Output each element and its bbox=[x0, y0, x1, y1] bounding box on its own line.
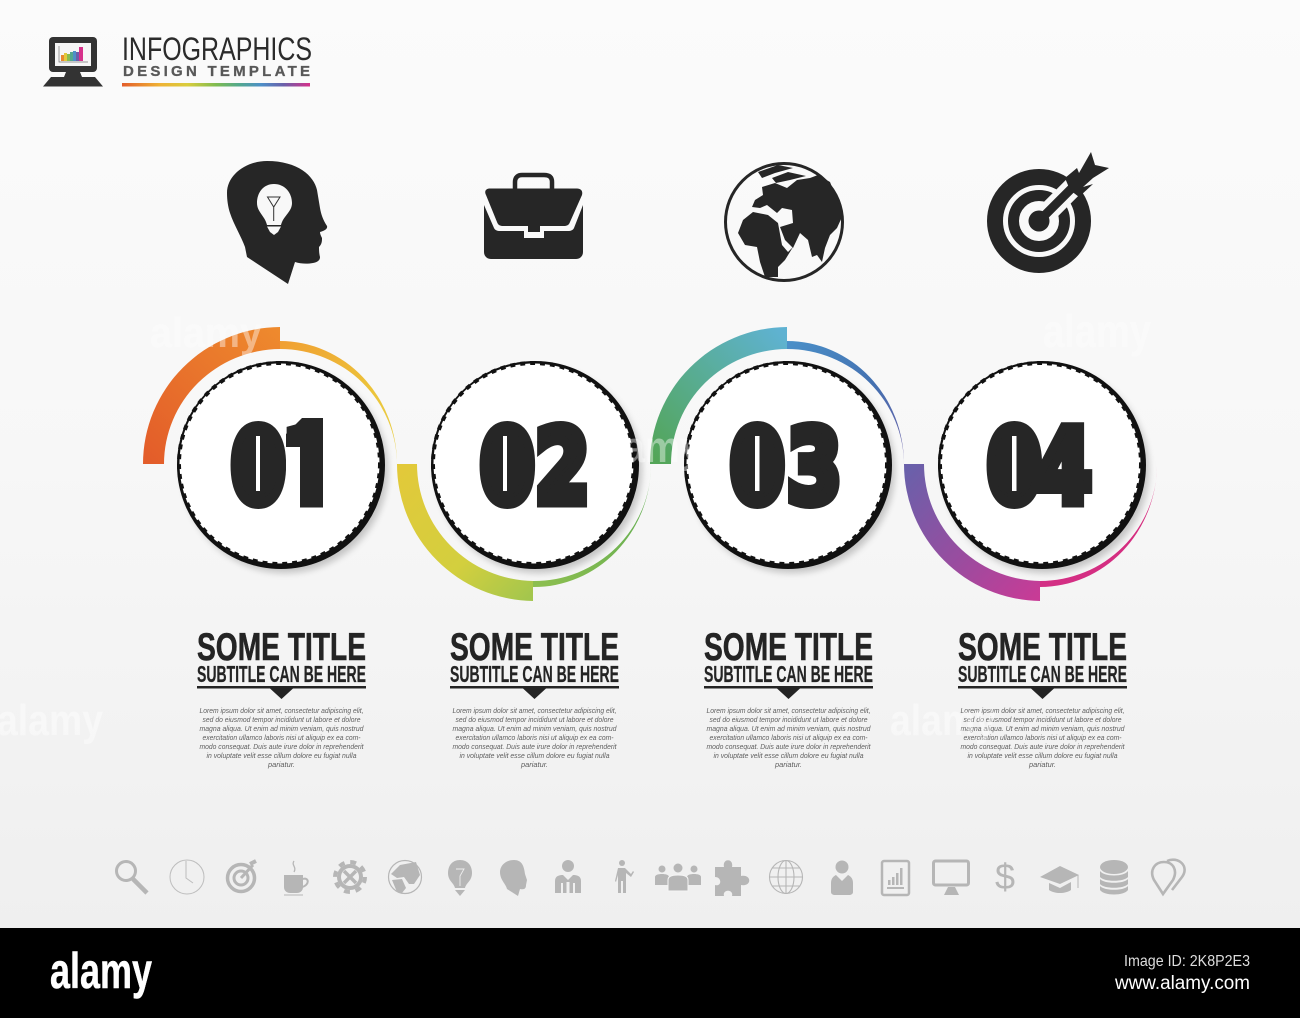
text block: step 4: SOME TITLE bbox=[958, 626, 1127, 669]
logo heading: INFOGRAPHICS bbox=[122, 31, 312, 67]
icon: team bbox=[655, 864, 701, 891]
icon: target with arrow bbox=[995, 152, 1109, 265]
watermarks: alamy bbox=[590, 423, 702, 472]
text block: step 1: Lorem ipsum dolor sit amet, consectetur adipiscing elit, bbox=[200, 706, 364, 715]
number 01 bbox=[231, 409, 337, 527]
text block: step 4: SUBTITLE CAN BE HERE bbox=[958, 661, 1127, 687]
icon row bbox=[116, 856, 1185, 897]
icon: clock bbox=[170, 860, 204, 894]
icon: coins bbox=[1100, 860, 1128, 894]
rainbow underline bbox=[122, 83, 310, 86]
text block: step 1 bbox=[197, 626, 366, 769]
icon: coffee cup bbox=[284, 861, 308, 895]
text block: step 4: sed do eiusmod tempor incididunt ut labore et dolore bbox=[964, 715, 1122, 724]
watermarks: alamy bbox=[0, 696, 103, 745]
text block: step 1: magna aliqua. Ut enim ad minim veniam, quis nostrud bbox=[200, 724, 364, 733]
text block: step 3: sed do eiusmod tempor incididunt ut labore et dolore bbox=[710, 715, 868, 724]
number 03: 0 bbox=[730, 409, 785, 527]
number badge 02 bbox=[431, 361, 642, 573]
icon: target bbox=[228, 861, 256, 892]
icon: dollar sign: $ bbox=[995, 856, 1015, 897]
icon: head with light bulb bbox=[227, 161, 327, 284]
text block: step 4: Lorem ipsum dolor sit amet, consectetur adipiscing elit, bbox=[960, 706, 1124, 715]
icon: tablet with chart bbox=[882, 861, 909, 895]
watermarks: alamy bbox=[890, 696, 996, 745]
text block: step 3: SUBTITLE CAN BE HERE bbox=[704, 661, 873, 687]
number badge 03 bbox=[684, 361, 895, 573]
panel: step 02 arc bbox=[397, 464, 651, 601]
number 02 bbox=[480, 409, 590, 527]
text block: step 2: modo consequat. Duis aute irure dolor in reprehenderit bbox=[452, 742, 617, 751]
text block: step 1: pariatur. bbox=[267, 760, 295, 769]
text block: step 1: modo consequat. Duis aute irure dolor in reprehenderit bbox=[200, 742, 364, 751]
text block: step 3: magna aliqua. Ut enim ad minim veniam, quis nostrud bbox=[706, 724, 871, 733]
icon: desktop monitor bbox=[934, 861, 968, 895]
text block: step 2: magna aliqua. Ut enim ad minim veniam, quis nostrud bbox=[452, 724, 617, 733]
number badge 04 bbox=[938, 361, 1149, 573]
footer logo: alamy bbox=[50, 943, 152, 999]
number 02: 0 bbox=[480, 409, 535, 527]
number 04 bbox=[987, 409, 1092, 527]
text block: step 4: exercitation ullamco laboris nisi ut aliquip ex ea com- bbox=[964, 733, 1122, 742]
text block: step 4: pariatur. bbox=[1028, 760, 1056, 769]
text block: step 2: sed do eiusmod tempor incididunt ut labore et dolore bbox=[456, 715, 614, 724]
icon: earth globe bbox=[726, 164, 842, 280]
text block: step 3 bbox=[704, 626, 873, 769]
icon: magnifier bbox=[116, 862, 147, 893]
text block: step 2: in voluptate velit esse cillum dolore eu fugiat nulla bbox=[460, 751, 610, 760]
watermarks: alamy bbox=[1043, 305, 1151, 357]
text block: step 2 bbox=[450, 626, 619, 769]
icon: wire globe bbox=[770, 860, 802, 894]
icon: computer monitor bbox=[43, 37, 103, 86]
icon: presenter bbox=[615, 860, 634, 893]
number 04: 4 bbox=[1037, 409, 1092, 527]
watermarks bbox=[0, 305, 1151, 745]
text block: step 3: in voluptate velit esse cillum dolore eu fugiat nulla bbox=[714, 751, 864, 760]
icon: user bbox=[831, 860, 853, 895]
number 02: 2 bbox=[535, 409, 590, 527]
watermarks: alamy bbox=[150, 309, 263, 356]
icon: small head bbox=[500, 860, 527, 896]
icon: small globe bbox=[388, 860, 422, 894]
image id: Image ID: 2K8P2E3 bbox=[1124, 953, 1250, 970]
icon: small bulb bbox=[448, 860, 472, 896]
text block: step 2: pariatur. bbox=[520, 760, 548, 769]
text block: step 2: Lorem ipsum dolor sit amet, consectetur adipiscing elit, bbox=[452, 706, 616, 715]
text block: step 2: exercitation ullamco laboris nisi ut aliquip ex ea com- bbox=[456, 733, 614, 742]
text block: step 1: exercitation ullamco laboris nisi ut aliquip ex ea com- bbox=[202, 733, 361, 742]
website: www.alamy.com bbox=[1114, 973, 1250, 994]
icon: map pins bbox=[1152, 860, 1185, 894]
text block: step 4 bbox=[958, 626, 1127, 769]
text block: step 2: SOME TITLE bbox=[450, 626, 619, 669]
number 03 bbox=[730, 409, 842, 527]
text block: step 3: modo consequat. Duis aute irure dolor in reprehenderit bbox=[706, 742, 871, 751]
text block: step 3: pariatur. bbox=[774, 760, 802, 769]
text block: step 2: SUBTITLE CAN BE HERE bbox=[450, 661, 619, 687]
panel: step 01 arc bbox=[143, 327, 397, 465]
icon: gear bbox=[335, 862, 365, 892]
panel: step 03 arc bbox=[650, 327, 904, 465]
number badge 01 bbox=[177, 361, 388, 573]
number 03: 3 bbox=[787, 409, 842, 527]
number 01: 0 bbox=[231, 409, 286, 527]
text block: step 3: Lorem ipsum dolor sit amet, consectetur adipiscing elit, bbox=[706, 706, 870, 715]
panel: step 04 arc bbox=[904, 464, 1157, 601]
logo subheading: DESIGN TEMPLATE bbox=[123, 63, 310, 80]
text block: step 1: SUBTITLE CAN BE HERE bbox=[197, 661, 366, 687]
text block: step 3: exercitation ullamco laboris nisi ut aliquip ex ea com- bbox=[710, 733, 868, 742]
text block: step 4: in voluptate velit esse cillum dolore eu fugiat nulla bbox=[968, 751, 1118, 760]
text block: step 4: modo consequat. Duis aute irure dolor in reprehenderit bbox=[960, 742, 1125, 751]
icon: graduation cap bbox=[1040, 866, 1079, 893]
number 01: 1 bbox=[282, 409, 337, 527]
text block: step 1: in voluptate velit esse cillum dolore eu fugiat nulla bbox=[206, 751, 356, 760]
header logo bbox=[43, 31, 312, 86]
number 04: 0 bbox=[987, 409, 1042, 527]
footer bar bbox=[0, 928, 1300, 1018]
text block: step 4: magna aliqua. Ut enim ad minim veniam, quis nostrud bbox=[960, 724, 1125, 733]
icon: businessman bbox=[555, 860, 581, 893]
text block: step 1: SOME TITLE bbox=[197, 626, 366, 669]
text block: step 1: sed do eiusmod tempor incididunt ut labore et dolore bbox=[202, 715, 360, 724]
text block: step 3: SOME TITLE bbox=[704, 626, 873, 669]
icon: briefcase bbox=[484, 175, 583, 259]
icon: puzzle piece bbox=[715, 860, 749, 896]
